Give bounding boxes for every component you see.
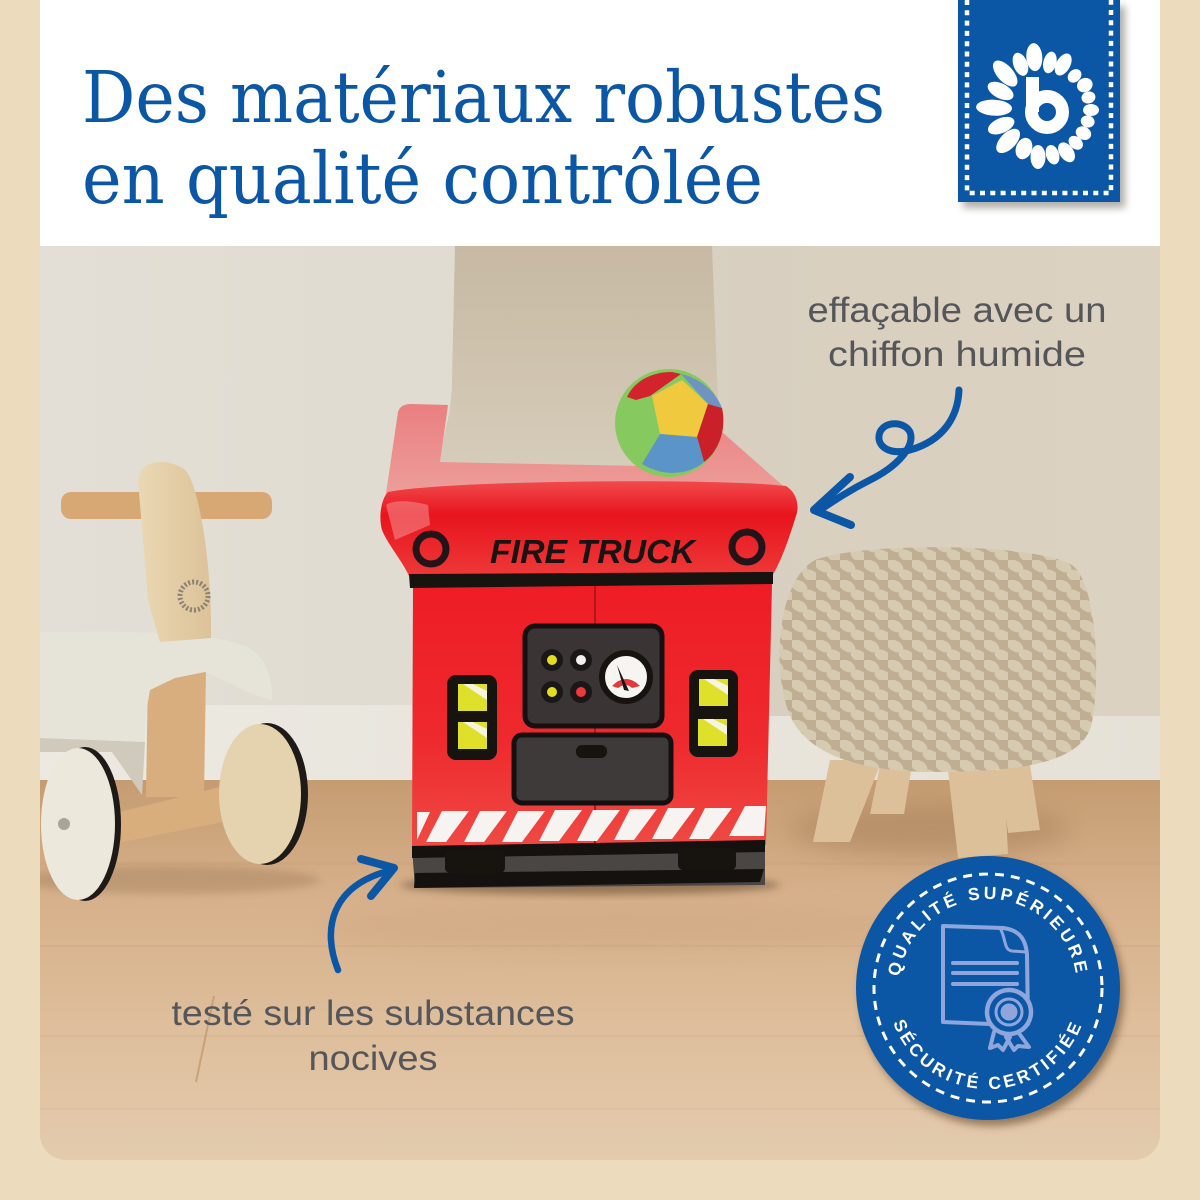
ball: red top patch [627,372,681,400]
stool: knit cushion [779,547,1096,772]
caption: wipeable: chiffon humide [828,335,1086,374]
knitted pouf stool [779,547,1096,858]
badge: bottom text: SÉCURITÉ CERTIFIÉE [894,1020,1082,1089]
caption: wipeable: effaçable avec un [808,291,1106,330]
box: bottom bumper [412,840,765,888]
caption: tested: nocives [308,1039,438,1078]
box: right window [689,670,738,757]
quality badge [855,856,1129,1131]
ball: yellow patch [652,380,708,437]
title: en qualité contrôlée [82,137,763,220]
ball: blue top patch [681,374,722,408]
box: black trim band [409,572,773,588]
box: lid highlight [386,501,430,540]
box: control panel [525,626,662,726]
box: lid label: FIRE TRUCK [490,533,697,570]
box: gauge [602,653,650,701]
box: white hazard stripes [417,806,766,842]
caption: tested: testé sur les substances [172,994,574,1033]
arrow: tested bottom [331,859,394,970]
caption: wipeable [809,296,1104,366]
bike: rear wheel [219,723,308,865]
baseboard [40,705,1160,786]
box: drawer [514,735,671,803]
fire truck storage box [380,404,798,895]
balance bike [20,462,320,901]
logo: sunflower petals [976,43,1099,169]
logo: letter b [1026,77,1062,128]
bike: frame [146,670,206,797]
wall [40,246,1160,716]
logo tag [958,0,1125,208]
caption: tested [172,999,574,1070]
badge: top text: QUALITÉ SUPÉRIEURE [888,886,1088,975]
wooden floor [40,780,1160,1160]
box: lid rivet left [416,534,446,564]
title: Des matériaux robustes [82,56,885,139]
linen cushion [440,246,720,466]
bike: handlebar [61,462,272,642]
box: lid rivet right [732,532,762,562]
bike: seat [40,670,206,742]
arrow: wipeable top [814,390,959,525]
ball: blue bottom patch [642,434,704,473]
title [82,56,885,220]
bike: front wheel [41,747,121,901]
badge: certificate icon [943,926,1031,1050]
plush ball [615,369,723,477]
photo panel [40,246,1160,1160]
box: body [412,583,772,848]
box: left window [447,675,497,760]
box: lid front [380,481,798,578]
box: lid top [385,404,790,500]
header: white title band [40,0,1160,246]
ball: red right patch [697,404,723,462]
stool: legs [813,760,1040,858]
